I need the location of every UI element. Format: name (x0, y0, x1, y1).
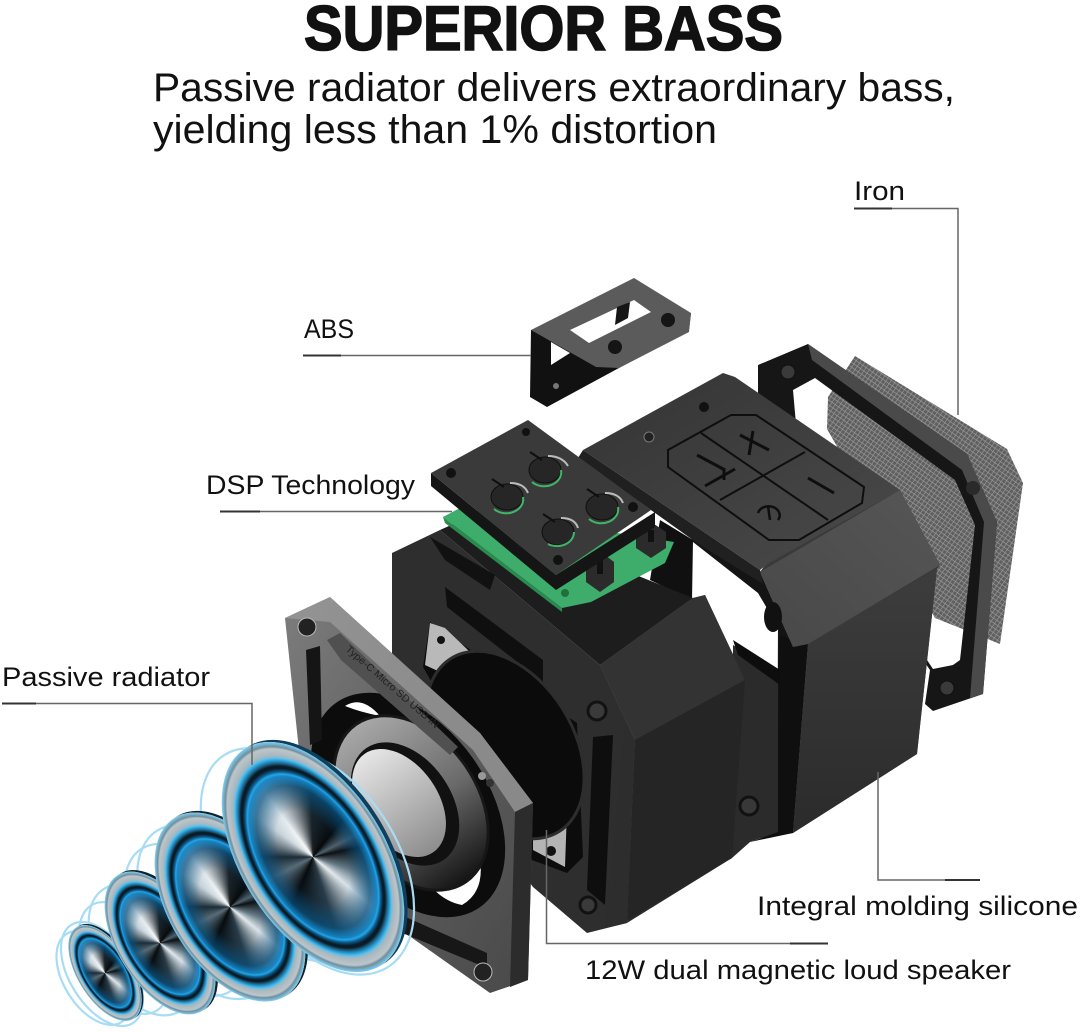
bottom slot (383, 907, 487, 968)
bracket divider (615, 302, 630, 325)
chamfer face (760, 490, 940, 647)
dark button plate top (431, 420, 651, 575)
label strip: Type-C Micro SD USB IN (343, 644, 441, 731)
front speaker block (392, 512, 780, 933)
black back edge of lower body (750, 636, 808, 842)
next icon (697, 455, 735, 486)
speaker mount (423, 622, 583, 873)
woofer ring (302, 687, 520, 919)
woofer cone (393, 622, 617, 868)
front passive radiator plate (271, 597, 545, 993)
plate button 3 (586, 494, 618, 520)
label: Iron: Iron (854, 176, 905, 206)
block underlay (600, 595, 745, 923)
recess on top (440, 512, 693, 665)
bracket top face (531, 278, 691, 368)
silver corners (425, 623, 470, 672)
slot (445, 587, 543, 682)
PCB and button plate (431, 420, 674, 612)
label: 12W dual magnetic loud speaker: 12W dual magnetic loud speaker (585, 955, 1011, 985)
label: DSP Technology: DSP Technology (206, 470, 416, 500)
plate hole (271, 657, 545, 953)
green circuit board (443, 508, 674, 608)
subtitle (153, 66, 955, 152)
minus icon (808, 478, 834, 493)
label: 12W dual magnetic loud speaker (546, 830, 1011, 985)
power icon (758, 506, 780, 520)
plate top ridge (285, 597, 533, 812)
chamfer (600, 595, 745, 740)
plate button 1 (529, 457, 561, 483)
groove (587, 735, 613, 905)
metal mesh (827, 356, 1023, 644)
plate body (285, 597, 533, 993)
rear body, silicone shell (578, 373, 940, 842)
subtitle: yielding less than 1% distortion (153, 108, 717, 152)
bracket dark side (530, 313, 691, 407)
plate holes (298, 618, 316, 636)
label: Passive radiator: Passive radiator (2, 662, 210, 692)
dark button plate side (431, 473, 655, 590)
ghost sound wave rings (41, 717, 452, 1034)
label strip (327, 633, 458, 755)
left slot (306, 646, 322, 745)
bracket window (570, 300, 651, 343)
block front face (392, 530, 635, 933)
rear frame (758, 344, 997, 711)
right side face (627, 680, 745, 920)
white crescent (417, 850, 481, 905)
passive radiator disc 3 (82, 853, 238, 1033)
top face (583, 373, 900, 570)
silver dome (333, 731, 465, 875)
frame outer band (808, 344, 997, 698)
ABS bracket (530, 278, 691, 407)
rear iron grille and frame (758, 344, 1023, 711)
button panel (668, 415, 864, 540)
plate right edge (510, 803, 533, 987)
plate button 2 (491, 484, 523, 510)
plus icon (740, 431, 769, 455)
bracket opening (551, 342, 570, 365)
passive radiator disc 4, smallest (53, 913, 157, 1033)
black inner edge (690, 536, 808, 840)
label: ABS: ABS (304, 314, 354, 344)
label: Integral molding silicone (757, 772, 1078, 921)
plate button 4 (542, 519, 574, 545)
subtitle: Passive radiator delivers extraordinary bass, (153, 66, 955, 110)
passive radiator disc 2 (123, 786, 337, 1028)
lower side face (793, 569, 937, 833)
tact switches (561, 522, 666, 597)
shell underlay (760, 490, 940, 833)
rear inner gap (650, 520, 693, 600)
label: Iron (854, 176, 958, 415)
passive radiator disc 1, largest (184, 710, 442, 1004)
top face dark rim (578, 450, 763, 584)
label: Integral molding silicone: Integral molding silicone (757, 891, 1078, 921)
label: Passive radiator (2, 662, 252, 765)
